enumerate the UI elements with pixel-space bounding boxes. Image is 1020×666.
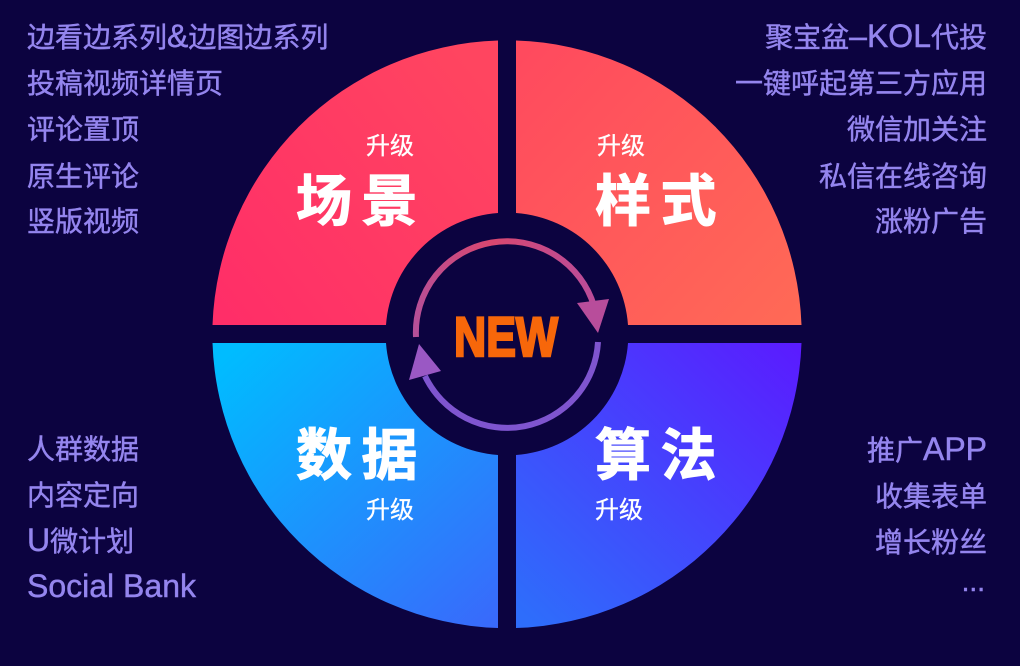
text block: bottom-left list: U微计划 <box>27 522 134 558</box>
arrow: lower arc <box>409 342 598 428</box>
text block: bottom-right list: 增长粉丝 <box>875 527 987 558</box>
text block: top-left list: 评论置顶 <box>27 114 139 145</box>
text block: top-right list: 涨粉广告 <box>875 206 987 237</box>
heading: 数据: 数据 <box>296 424 427 487</box>
subheading: 场景 升级: 升级 <box>366 133 414 160</box>
center label NEW: NEW <box>454 305 558 368</box>
subheading: 算法 升级: 升级 <box>595 497 643 524</box>
text block: top-right list: 微信加关注 <box>847 114 987 145</box>
text block: top-left list: 原生评论 <box>27 161 139 192</box>
text block: top-right list: 一键呼起第三方应用 <box>735 68 987 99</box>
subheading: 样式 升级: 升级 <box>597 133 645 160</box>
text block: bottom-right list <box>867 431 987 597</box>
text block: top-left list <box>27 18 328 237</box>
subheading: 数据 升级: 升级 <box>366 497 414 524</box>
panel: 算法 quadrant <box>516 343 802 628</box>
panel: 样式 quadrant <box>516 40 802 325</box>
text block: bottom-left list: 人群数据 <box>27 434 139 465</box>
panel: 数据 quadrant <box>212 343 498 628</box>
center cycle icon <box>409 241 609 428</box>
panel: 场景 quadrant <box>212 40 498 325</box>
heading: 样式: 样式 <box>595 170 726 233</box>
text block: top-left list: 边看边系列&边图边系列 <box>27 18 328 54</box>
text block: top-left list: 竖版视频 <box>27 206 139 237</box>
text block: bottom-left list: 内容定向 <box>27 480 139 511</box>
heading: 算法: 算法 <box>595 424 726 487</box>
text block: bottom-left list: Social Bank <box>27 568 197 604</box>
text block: top-right list: 私信在线咨询 <box>819 161 987 192</box>
text block: bottom-right list: ... <box>962 566 985 597</box>
text block: top-right list: 聚宝盆–KOL代投 <box>765 18 987 54</box>
arrow: upper arc <box>416 241 609 337</box>
text block: top-left list: 投稿视频详情页 <box>27 68 223 99</box>
text block: top-right list <box>735 18 987 237</box>
text block: bottom-right list: 收集表单 <box>875 481 987 512</box>
text block: bottom-left list <box>27 434 197 604</box>
heading: 场景: 场景 <box>296 170 427 233</box>
text block: bottom-right list: 推广APP <box>867 431 987 467</box>
